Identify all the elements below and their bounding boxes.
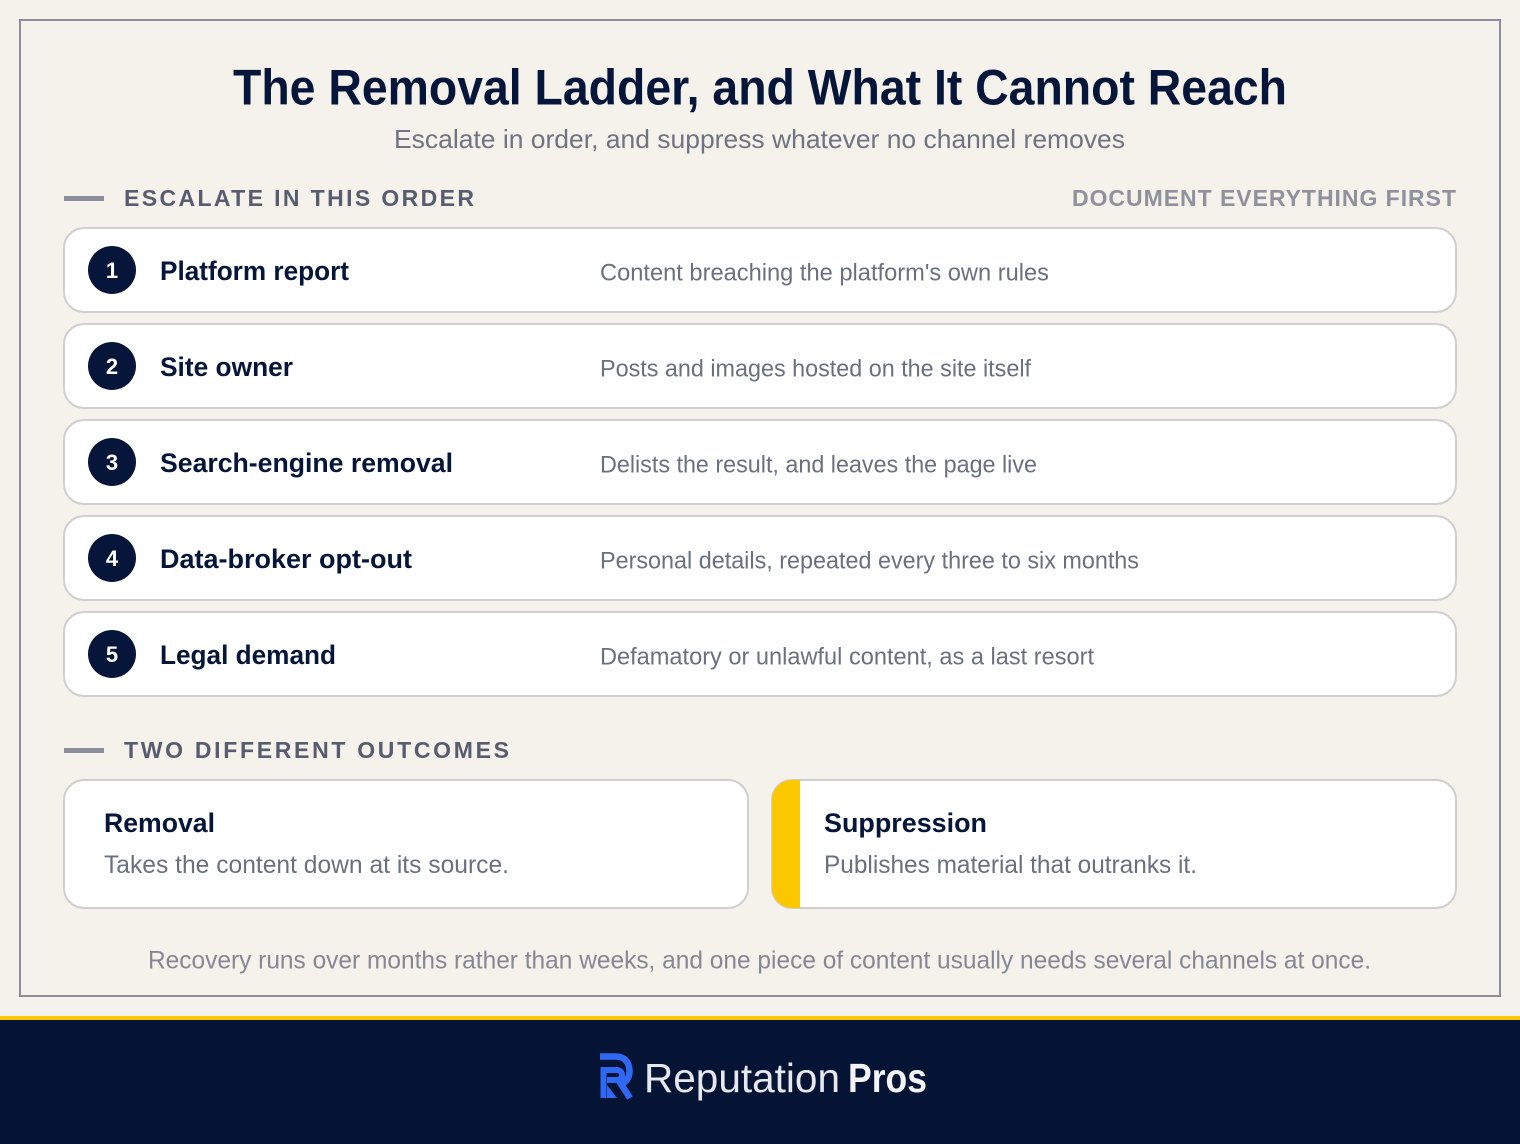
row 4: data-broker opt-out: 4 [106, 546, 119, 571]
ladder rows [64, 228, 1456, 696]
logo: Reputation Pros: Pros [848, 1055, 927, 1101]
card: removal: Removal [104, 808, 215, 838]
subtitle: Escalate in order, and suppress whatever no channel removes [394, 124, 1125, 154]
card: suppression: Publishes material that outranks it. [824, 851, 1197, 879]
section heading: escalate: ESCALATE IN THIS ORDER [124, 185, 474, 211]
row 4: data-broker opt-out [64, 516, 1456, 600]
row 2: site owner: Posts and images hosted on the site itself [600, 356, 1031, 382]
card: suppression [772, 780, 1456, 908]
row 5: legal demand: Legal demand [160, 640, 336, 670]
card: removal: Takes the content down at its source. [104, 851, 509, 879]
row 2: site owner: Site owner [160, 352, 293, 382]
logo: Reputation Pros [600, 1055, 927, 1101]
row 5: legal demand [64, 612, 1456, 696]
row 4: data-broker opt-out: Data-broker opt-out [160, 544, 412, 574]
row 5: legal demand: 5 [106, 642, 118, 667]
row 3: search-engine removal: Delists the result, and leaves the page live [600, 452, 1037, 478]
card: removal [64, 780, 748, 908]
row 4: data-broker opt-out: Personal details, repeated every three to six months [600, 548, 1139, 574]
section heading: outcomes: TWO DIFFERENT OUTCOMES [124, 737, 509, 763]
footer band [0, 1016, 1520, 1144]
row 1: platform report: Content breaching the platform's own rules [600, 260, 1049, 286]
closing note: Recovery runs over months rather than weeks, and one piece of content usually needs several channels at once. [148, 946, 1371, 974]
row 5: legal demand: Defamatory or unlawful content, as a last resort [600, 644, 1094, 670]
title: The Removal Ladder, and What It Cannot Reach [233, 60, 1287, 116]
icon: R mark [600, 1056, 630, 1098]
row 1: platform report: 1 [106, 258, 118, 283]
row 2: site owner: 2 [106, 354, 118, 379]
row 1: platform report: Platform report [160, 256, 349, 286]
row 3: search-engine removal: 3 [106, 450, 118, 475]
side note: document first: DOCUMENT EVERYTHING FIRST [1072, 185, 1456, 211]
wordmark: Reputation [644, 1055, 840, 1101]
row 1: platform report [64, 228, 1456, 312]
row 3: search-engine removal [64, 420, 1456, 504]
row 3: search-engine removal: Search-engine removal [160, 448, 453, 478]
row 2: site owner [64, 324, 1456, 408]
card: suppression: Suppression [824, 808, 987, 838]
